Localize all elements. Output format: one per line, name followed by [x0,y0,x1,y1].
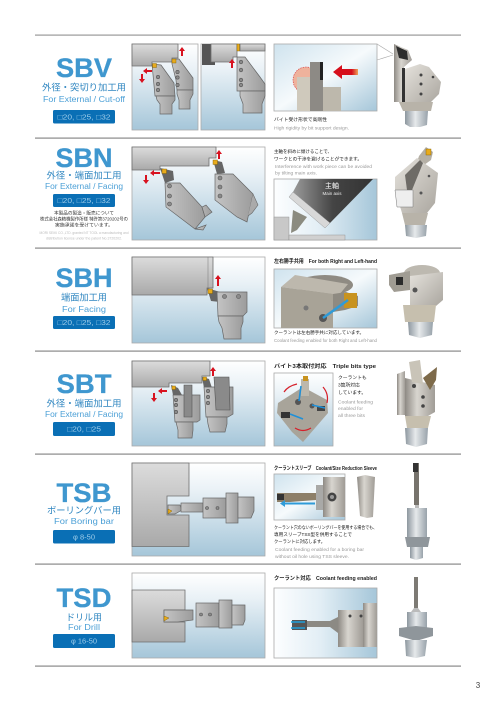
subtitle English: For Drill [68,622,100,632]
photo: SBH tool [389,265,443,338]
heading: both hands: 左右勝手共用 For both Right and Left-hand [274,257,377,265]
caption Japanese: クーラントは左右勝手共に対応しています。 [274,329,364,336]
license note Japanese: 本製品の製造・販売について [54,210,114,216]
section: SBV [42,44,441,132]
description English: by tilting main axis. [275,170,317,176]
side note English: all three bits [338,413,366,419]
license note Japanese: 株式会社森精機製作所様 特許第3720202号の [40,216,128,222]
subtitle English: For External / Cut-off [43,94,126,104]
size badge [53,316,115,329]
photo: TSB tool [405,463,430,560]
diagram: facing [132,257,265,343]
title: TSD: TSD [56,583,112,613]
description Japanese: クーラントに対応します。 [274,538,325,545]
title: SBH: SBH [56,263,112,293]
description English: Coolant feeding enabled for a boring bar [275,547,364,553]
license note English [40,231,128,240]
size badge: □20, □25, □32 [58,196,110,205]
subtitle English: For External / Facing [45,181,123,191]
inset: triple bits coolant [274,373,333,446]
caption English: Coolant feeding enabled for both Right and Left-hand [274,338,377,344]
license note Japanese: 実施承諾を受けています。 [55,222,113,228]
description Japanese: 専用スリーブTSS型を併用することで [274,531,352,538]
side note Japanese [338,375,367,396]
description English: Interference with work piece can be avoided [275,164,372,170]
inset: tilted main axis [274,179,377,240]
inset: drill coolant [274,588,377,658]
diagram: external cutting [132,44,198,130]
description English [275,164,372,176]
diagram: external and facing [132,147,265,240]
side note Japanese: クーラントも [338,375,367,381]
license note Japanese [40,210,128,228]
inset: coolant both hands [274,269,377,328]
diagram: cut-off [201,44,265,130]
side note Japanese: しています。 [338,390,366,396]
size badge [53,194,115,207]
section: SBN [40,143,438,240]
description Japanese [274,524,377,545]
description Japanese: ワークとの干渉を避けることができます。 [274,156,362,162]
license note English: distribution license under the patent No.3720202. [46,236,122,240]
main axis label [322,181,342,196]
size badge [53,422,115,436]
page number: 3 [476,681,481,690]
title: TSB: TSB [56,478,112,508]
inset: bit support photo [274,44,393,111]
caption Japanese: バイト受け形状で高剛性 [274,116,327,123]
photo: sleeve [357,475,375,518]
subtitle English: For Boring bar [54,516,114,526]
heading: coolant feeding: クーラント対応 Coolant feeding enabled [274,574,377,582]
size badge: □20, □25, □32 [58,318,110,327]
side note English [338,400,373,419]
size badge: □20, □25 [67,425,101,434]
main axis label: 主軸 [325,181,339,190]
subtitle Japanese: 端面加工用 [61,292,107,302]
subtitle Japanese: 外径・端面加工用 [46,170,122,180]
side note Japanese: 3箇所対応 [338,382,360,388]
section: TSB [47,463,430,560]
photo: SBN tool [395,147,438,238]
size badge: φ 16-50 [71,637,97,646]
diagram: drilling [132,573,265,658]
description Japanese: クーラント穴のないボーリングバーを使用する場合でも、 [274,524,377,531]
license note English: MORI SEIKI CO.,LTD. granted NT TOOL a manufacturing and [40,231,128,235]
size badge [53,634,115,648]
heading: sleeve: クーラントスリーブ Coolant/Size Reduction Sleeve [274,464,377,472]
description English [275,547,364,560]
side note English: enabled for [338,406,363,412]
photo: SBV tool [394,44,441,127]
size badge [53,110,115,124]
caption English: High rigidity by bit support design. [274,126,349,132]
photo: TSD tool [399,577,433,658]
size badge [53,530,115,544]
heading: triple bits: バイト3本取付対応 Triple bits type [274,362,376,370]
size badge: □20, □25, □32 [58,112,110,122]
main axis label: Main axis [322,191,342,196]
inset: coolant sleeve [274,474,345,520]
diagram: triple bits [132,361,265,446]
side note English: Coolant feeding [338,400,373,406]
description Japanese [274,148,362,162]
diagram: boring [132,463,265,556]
subtitle Japanese: ボーリングバー用 [47,504,121,516]
subtitle Japanese: ドリル用 [66,612,102,622]
photo: SBT tool [397,360,437,447]
subtitle Japanese: 外径・突切り加工用 [42,82,126,92]
subtitle Japanese: 外径・端面加工用 [46,398,122,408]
description English: without oil hole using TSS sleeve. [275,554,349,560]
section: SBT [45,360,437,447]
section: TSD [53,573,433,658]
section: SBH [53,257,443,344]
title: SBN: SBN [56,143,112,173]
size badge: φ 8-50 [73,532,95,542]
title: SBV: SBV [56,53,112,83]
subtitle English: For External / Facing [45,409,123,419]
title: SBT: SBT [56,369,112,399]
subtitle English: For Facing [62,304,106,314]
description Japanese: 主軸を斜めに傾けることで、 [274,148,332,155]
